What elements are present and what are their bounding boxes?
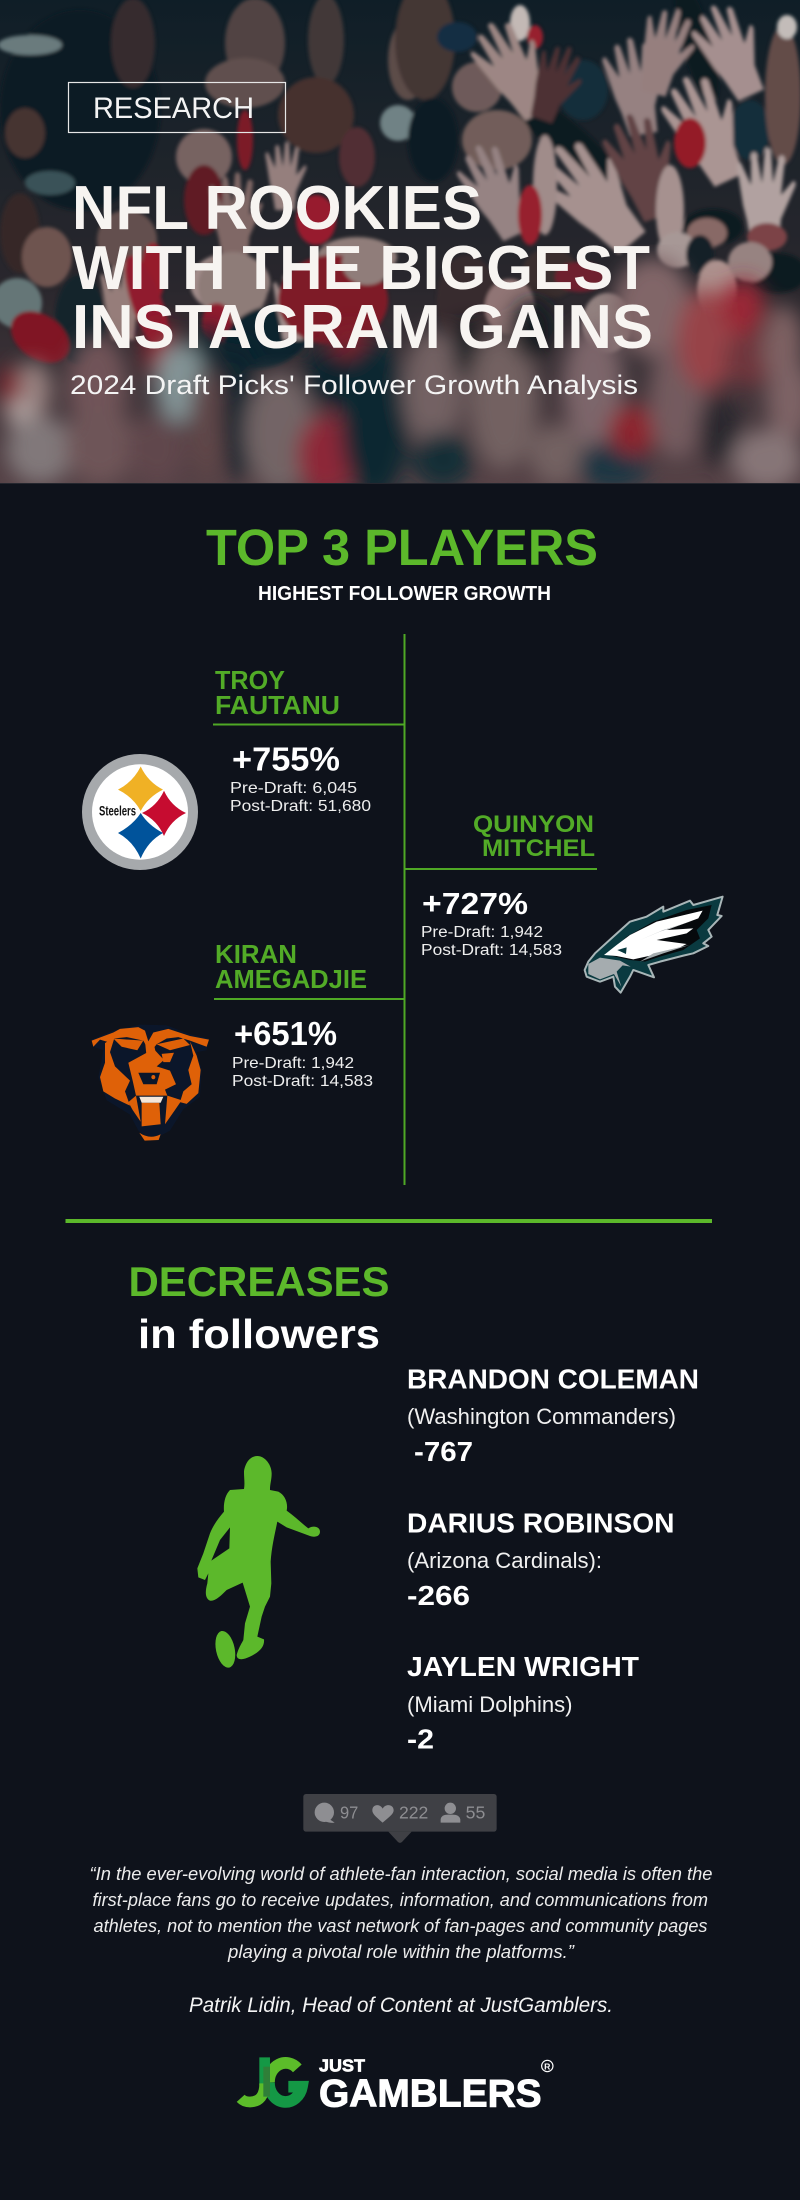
quote: athletes, not to mention the vast network of fan-pages and community pages — [94, 1916, 708, 1936]
logo: Just Gamblers: GAMBLERS — [319, 2072, 542, 2116]
player: Troy Fautanu: Post-Draft: 51,680 — [230, 798, 371, 815]
player: Troy Fautanu — [213, 665, 404, 815]
divider — [66, 1219, 712, 1223]
title: INSTAGRAM GAINS — [72, 293, 653, 362]
player: Kiran Amegadjie: Post-Draft: 14,583 — [232, 1073, 373, 1090]
subtitle: 2024 Draft Picks' Follower Growth Analysis — [70, 370, 638, 400]
subheading: highest follower growth: HIGHEST FOLLOWER GROWTH — [258, 582, 551, 605]
icon: Eagles logo — [585, 897, 723, 993]
player: Troy Fautanu: +755% — [232, 740, 340, 778]
heading: decreases in followers: in followers — [138, 1311, 380, 1357]
engagement bubble: comments, likes, followers — [303, 1794, 497, 1843]
quote attribution: Patrik Lidin, Head of Content at JustGamblers. — [189, 1994, 613, 2017]
decrease item: Brandon Coleman: (Washington Commanders) — [407, 1404, 676, 1429]
logo: Just Gamblers: R — [544, 2061, 551, 2071]
engagement bubble: comments, likes, followers: 222 — [399, 1803, 428, 1823]
player: Quinyon Mitchel: Pre-Draft: 1,942 — [421, 924, 543, 941]
icon: kicker silhouette — [197, 1456, 320, 1670]
quote: “In the ever-evolving world of athlete-fan interaction, social media is often the — [90, 1864, 712, 1884]
decrease item: Jaylen Wright: JAYLEN WRIGHT — [407, 1651, 639, 1682]
decrease item: Brandon Coleman: -767 — [414, 1436, 473, 1467]
hero photo: crowd of raised hands — [0, 0, 800, 500]
player: Quinyon Mitchel — [405, 811, 597, 959]
decrease item: Jaylen Wright — [407, 1651, 639, 1754]
icon: Bears logo — [92, 1025, 209, 1141]
research tag — [68, 82, 286, 132]
title: NFL ROOKIES — [72, 174, 482, 243]
title: WITH THE BIGGEST — [72, 234, 650, 303]
heading: decreases in followers: DECREASES — [128, 1258, 390, 1305]
player: Quinyon Mitchel: QUINYON — [473, 811, 594, 838]
logo: Just Gamblers: JUST — [319, 2056, 365, 2076]
heading: decreases in followers — [128, 1258, 390, 1357]
decrease item: Darius Robinson: -266 — [407, 1580, 470, 1611]
decrease item: Brandon Coleman — [407, 1364, 699, 1467]
timeline spine — [404, 634, 406, 1185]
engagement bubble: comments, likes, followers: 97 — [340, 1803, 358, 1823]
decrease item: Darius Robinson: DARIUS ROBINSON — [407, 1508, 674, 1538]
player: Kiran Amegadjie — [214, 939, 404, 1090]
title — [72, 174, 653, 362]
player: Quinyon Mitchel: MITCHEL — [482, 835, 595, 862]
heading: top 3 players: TOP 3 PLAYERS — [206, 519, 598, 576]
decrease item: Brandon Coleman: BRANDON COLEMAN — [407, 1364, 699, 1394]
player: Kiran Amegadjie: +651% — [234, 1015, 337, 1052]
quote: playing a pivotal role within the platforms.” — [227, 1942, 575, 1962]
player: Quinyon Mitchel: Post-Draft: 14,583 — [421, 942, 562, 959]
quote: first-place fans go to receive updates, information, and communications from — [92, 1890, 708, 1910]
icon: Steelers logo: Steelers — [99, 804, 136, 819]
player: Kiran Amegadjie: Pre-Draft: 1,942 — [232, 1055, 354, 1072]
player: Troy Fautanu: Pre-Draft: 6,045 — [230, 780, 357, 797]
quote — [90, 1864, 712, 1962]
decrease item: Darius Robinson: (Arizona Cardinals): — [407, 1548, 602, 1573]
logo: Just Gamblers — [241, 2056, 553, 2116]
player: Quinyon Mitchel: +727% — [422, 886, 528, 921]
hero bottom edge — [0, 483, 800, 484]
decrease item: Jaylen Wright: -2 — [407, 1724, 434, 1754]
icon: Steelers logo — [82, 754, 198, 870]
player: Kiran Amegadjie: KIRAN — [215, 939, 297, 969]
research tag: RESEARCH — [93, 92, 254, 125]
player: Kiran Amegadjie: AMEGADJIE — [215, 964, 367, 994]
player: Troy Fautanu: FAUTANU — [215, 690, 340, 720]
engagement bubble: comments, likes, followers: 55 — [466, 1803, 485, 1823]
decrease item: Jaylen Wright: (Miami Dolphins) — [407, 1692, 572, 1717]
decrease item: Darius Robinson — [407, 1508, 674, 1611]
player: Troy Fautanu: TROY — [215, 665, 285, 695]
